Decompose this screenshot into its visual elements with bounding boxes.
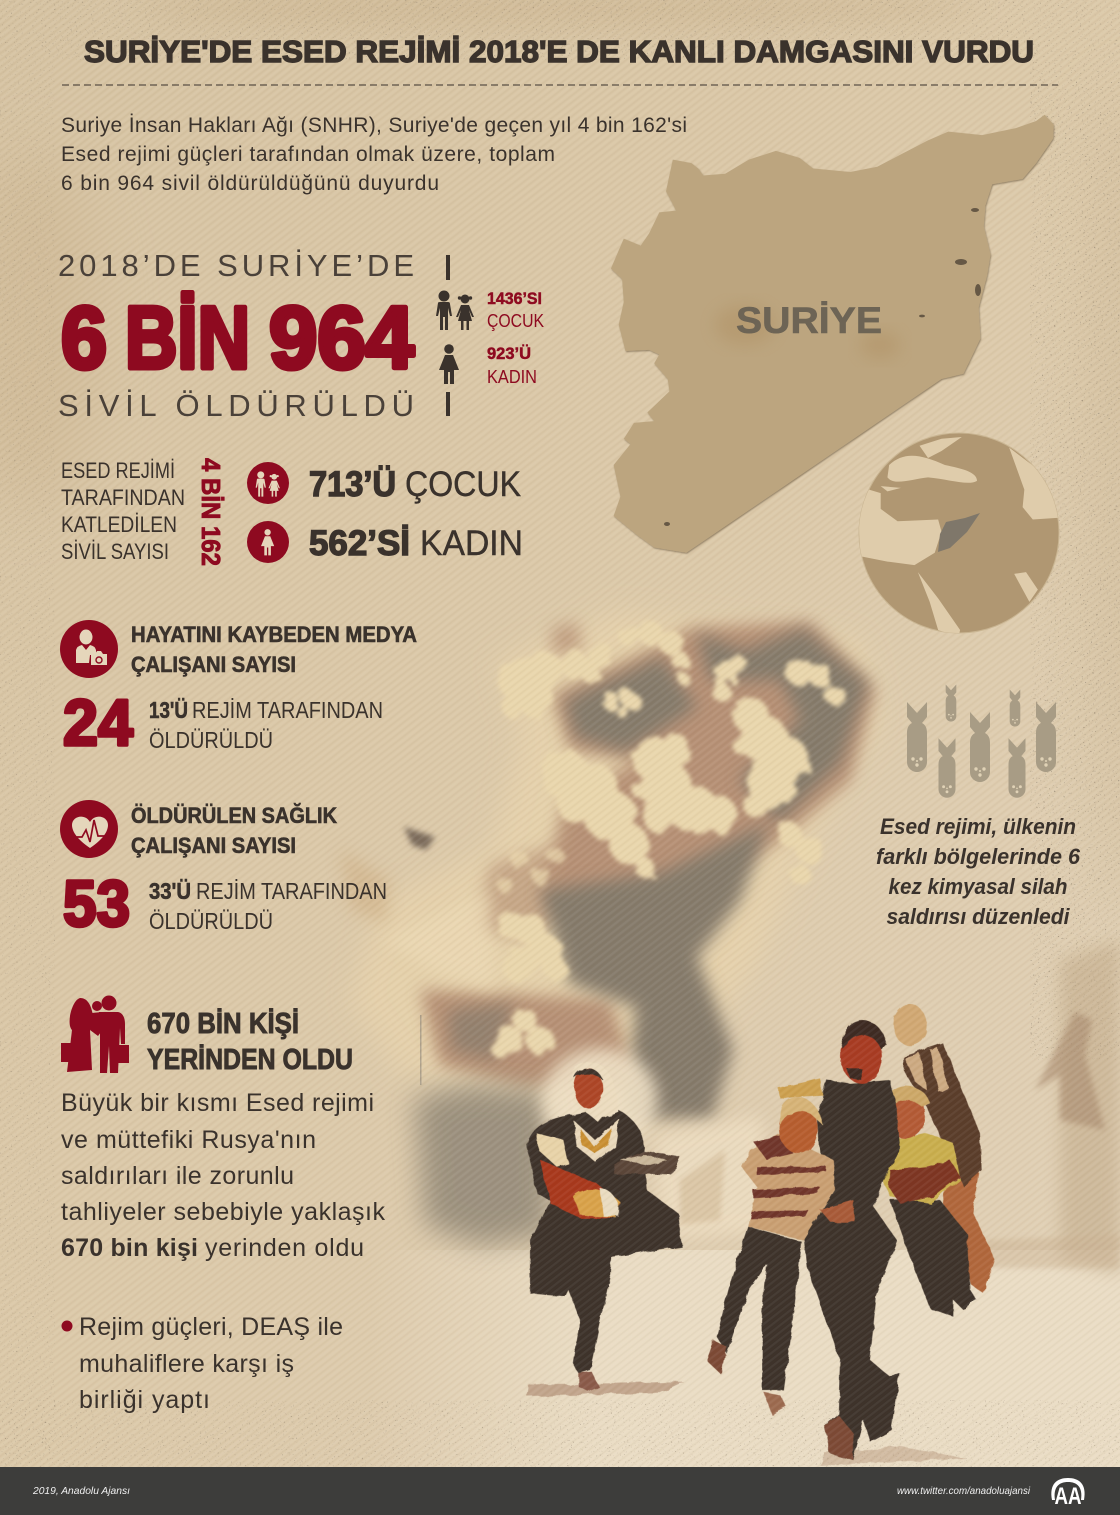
twitter address: www.twitter.com/anadoluajansi xyxy=(897,1485,1031,1497)
panel: health workers xyxy=(60,800,387,940)
displaced heading: YERİNDEN OLDU xyxy=(147,1044,353,1076)
displaced paragraph: tahliyeler sebebiyle yaklaşık xyxy=(61,1198,386,1226)
stat number: BİN xyxy=(125,288,250,387)
women killed by regime: 562’Sİ xyxy=(309,524,410,563)
displaced paragraph: saldırıları ile zorunlu xyxy=(61,1162,294,1190)
stat number: 964 xyxy=(269,288,414,387)
displaced heading xyxy=(147,1008,353,1076)
chemical attacks text: farklı bölgelerinde 6 xyxy=(876,844,1081,869)
displaced heading: 670 BİN KİŞİ xyxy=(147,1008,299,1040)
locator globe xyxy=(857,433,1060,637)
icon: journalist xyxy=(60,620,118,678)
regime victims label: ESED REJİMİ xyxy=(61,458,175,483)
displaced paragraph: Büyük bir kısmı Esed rejimi xyxy=(61,1089,374,1117)
health heading xyxy=(131,803,337,858)
intro text: 6 bin 964 sivil öldürüldüğünü duyurdu xyxy=(61,172,439,195)
icon: chemical bombs xyxy=(907,684,1056,798)
chemical attacks text: Esed rejimi, ülkenin xyxy=(880,814,1076,839)
health heading: ÖLDÜRÜLEN SAĞLIK xyxy=(131,803,337,828)
bullet note: Rejim güçleri, DEAŞ ile xyxy=(79,1313,343,1341)
main stat xyxy=(58,248,414,423)
regime victims label: KATLEDİLEN xyxy=(61,512,177,537)
regime victims label xyxy=(61,458,185,564)
number: 53: 53 xyxy=(63,867,130,940)
children killed by regime: 713’Ü xyxy=(309,465,396,504)
displaced paragraph xyxy=(61,1089,386,1262)
bullet note xyxy=(62,1313,343,1414)
women count: KADIN xyxy=(487,367,537,387)
icon: woman xyxy=(439,344,459,384)
bullet note: muhaliflere karşı iş xyxy=(79,1350,294,1378)
children killed by regime xyxy=(309,465,521,504)
media heading: ÇALIŞANI SAYISI xyxy=(131,652,296,677)
regime victims block xyxy=(61,458,523,566)
icon: displaced family xyxy=(61,996,129,1073)
intro text: Esed rejimi güçleri tarafından olmak üzere, toplam xyxy=(61,143,555,166)
women count xyxy=(487,344,537,387)
copyright: 2019, Anadolu Ajansı xyxy=(32,1485,130,1497)
stat number: 6 xyxy=(61,288,107,387)
intro text xyxy=(61,114,687,195)
panel: media workers xyxy=(60,620,417,759)
media detail: REJİM TARAFINDAN xyxy=(192,697,383,723)
city and ruins behind figures xyxy=(415,940,1120,1275)
woman carrying child xyxy=(527,1061,682,1392)
icon: children xyxy=(436,290,474,330)
regime victims label: TARAFINDAN xyxy=(61,485,185,510)
women killed by regime: KADIN xyxy=(420,524,523,563)
side breakdown xyxy=(436,255,544,416)
children killed by regime: ÇOCUK xyxy=(405,465,521,504)
chemical attacks text xyxy=(876,814,1081,929)
children count: 1436’SI xyxy=(487,289,542,308)
displaced paragraph: yerinden oldu xyxy=(205,1234,364,1262)
health detail: ÖLDÜRÜLDÜ xyxy=(149,908,273,934)
footer bar xyxy=(0,1467,1120,1515)
stat heading: 2018’DE SURİYE’DE xyxy=(58,248,414,283)
women killed by regime xyxy=(309,524,523,563)
icon: children circle xyxy=(247,462,289,504)
displaced paragraph: ve müttefiki Rusya'nın xyxy=(61,1126,316,1154)
intro text: Suriye İnsan Hakları Ağı (SNHR), Suriye'de geçen yıl 4 bin 162'si xyxy=(61,114,687,137)
media detail: ÖLDÜRÜLDÜ xyxy=(149,727,273,753)
displaced paragraph: 670 bin kişi xyxy=(61,1234,198,1262)
title: SURİYE'DE ESED REJİMİ 2018'E DE KANLI DAMGASINI VURDU xyxy=(84,34,1034,69)
number: 24: 24 xyxy=(63,686,133,759)
boy at right xyxy=(873,1086,977,1317)
map label: SURİYE xyxy=(736,300,882,341)
health detail: 33'Ü xyxy=(149,878,191,904)
logo: AA xyxy=(1051,1478,1085,1510)
icon: woman circle xyxy=(247,521,289,563)
stat number xyxy=(61,288,414,387)
logo: AA: AA xyxy=(1054,1483,1082,1510)
old man at back xyxy=(893,1004,995,1293)
regime victims label: SİVİL SAYISI xyxy=(61,539,169,564)
children count: ÇOCUK xyxy=(487,311,544,331)
vertical total: 4 BİN 162 xyxy=(196,458,226,566)
media heading xyxy=(131,622,417,677)
ground shadows xyxy=(527,1382,967,1465)
icon: heart with pulse xyxy=(60,800,118,858)
media detail: 13'Ü xyxy=(149,697,188,723)
chemical attacks text: kez kimyasal silah xyxy=(888,874,1068,899)
stat caption: SİVİL ÖLDÜRÜLDÜ xyxy=(58,388,414,423)
media heading: HAYATINI KAYBEDEN MEDYA xyxy=(131,622,417,647)
bullet note: birliği yaptı xyxy=(79,1386,210,1414)
photo: refugee family running xyxy=(527,1004,995,1465)
smoke cloud xyxy=(340,612,880,1118)
women count: 923’Ü xyxy=(487,344,531,363)
health detail: REJİM TARAFINDAN xyxy=(196,878,387,904)
chemical attacks text: saldırısı düzenledi xyxy=(886,904,1070,929)
health heading: ÇALIŞANI SAYISI xyxy=(131,833,296,858)
man in centre xyxy=(803,1020,900,1460)
health detail xyxy=(149,878,387,934)
children count xyxy=(487,289,544,331)
media detail xyxy=(149,697,383,753)
boy at left with striped shirt xyxy=(706,1078,855,1415)
panel: displaced people xyxy=(61,996,386,1414)
map: Syria xyxy=(611,115,1054,553)
